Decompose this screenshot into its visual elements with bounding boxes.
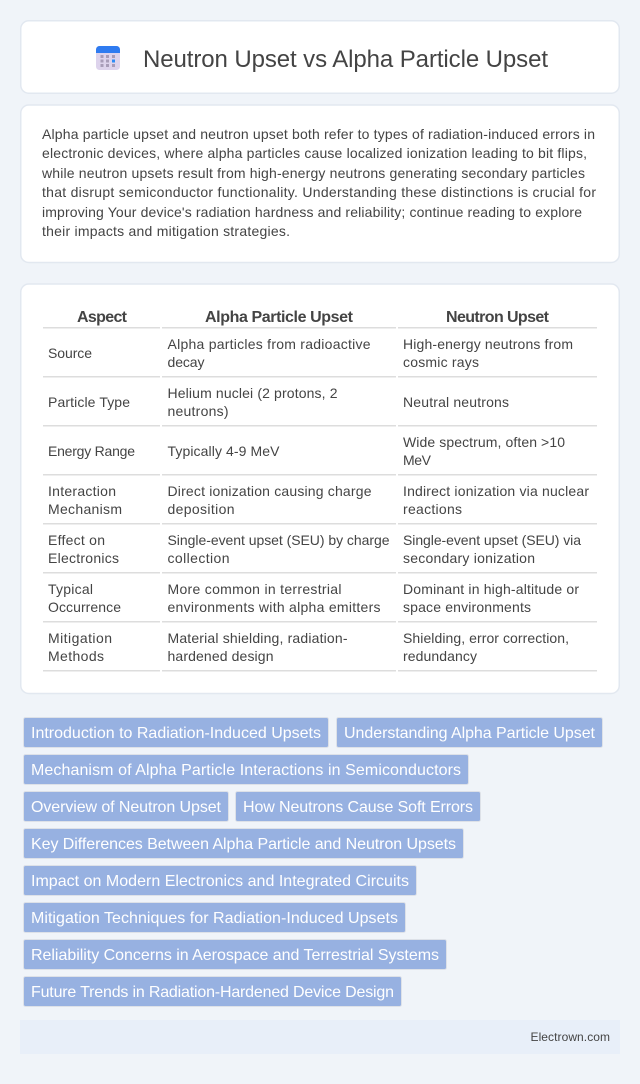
row: effect on electronics: Single-event upset (SEU) by charge <box>168 532 390 548</box>
intro paragraph: their impacts and mitigation strategies. <box>42 223 290 239</box>
tag: mitigation: Mitigation Techniques for Radiation-Induced Upsets <box>31 910 398 927</box>
row: typical occurrence: More common in terrestrial <box>168 581 342 597</box>
tag: reliability: Reliability Concerns in Aerospace and Terrestrial Systems <box>31 947 439 964</box>
row: energy range: MeV <box>403 452 432 468</box>
intro paragraph <box>41 126 596 239</box>
row: energy range: Wide spectrum, often >10 <box>403 434 565 450</box>
icon: calendar grid <box>96 46 120 70</box>
row: mitigation methods: Mitigation <box>48 630 112 646</box>
tag: how neutrons cause soft errors <box>236 792 480 822</box>
tag: introduction: Introduction to Radiation-Induced Upsets <box>31 725 321 742</box>
title: Neutron Upset vs Alpha Particle Upset <box>143 46 548 73</box>
row: typical occurrence: Occurrence <box>48 599 121 615</box>
row: typical occurrence: environments with alpha emitters <box>168 599 380 615</box>
intro paragraph: that disrupt semiconductor functionality. Understanding these distinctions is crucial for <box>42 184 596 200</box>
row: effect on electronics: Effect on <box>48 532 105 548</box>
row: energy range: Typically 4-9 MeV <box>168 443 280 459</box>
row: effect on electronics: Single-event upset (SEU) via <box>403 532 581 548</box>
row: energy range: Energy Range <box>48 443 135 459</box>
tag: impact: Impact on Modern Electronics and Integrated Circuits <box>31 873 409 890</box>
row: interaction mechanism: Interaction <box>48 483 116 499</box>
row: typical occurrence: space environments <box>403 599 531 615</box>
row: typical occurrence <box>43 581 597 622</box>
row: mitigation methods <box>43 630 597 672</box>
row: effect on electronics: collection <box>168 550 230 566</box>
row: interaction mechanism: reactions <box>403 501 462 517</box>
row: source: cosmic rays <box>403 354 479 370</box>
row: particle type: Particle Type <box>48 394 130 410</box>
panel: comparison table <box>21 284 619 694</box>
intro paragraph: while neutron upsets result from high-energy neutrons generating secondary particles <box>41 165 585 181</box>
tag: understanding alpha: Understanding Alpha Particle Upset <box>344 725 596 742</box>
row: typical occurrence: Typical <box>48 581 93 597</box>
tag: reliability <box>24 940 446 970</box>
row: source: Source <box>48 345 92 361</box>
tag: mechanism <box>24 754 468 784</box>
tag: mechanism: Mechanism of Alpha Particle Interactions in Semiconductors <box>31 762 461 779</box>
row: mitigation methods: hardened design <box>168 648 274 664</box>
panel: introduction <box>21 105 619 262</box>
row: interaction mechanism: deposition <box>168 501 234 517</box>
panel: topic tags <box>24 718 602 1006</box>
tag: future trends: Future Trends in Radiation-Hardened Device Design <box>31 984 394 1001</box>
tag: understanding alpha <box>336 718 602 748</box>
row: source: High-energy neutrons from <box>403 336 573 352</box>
table header row: Alpha Particle Upset <box>205 309 354 326</box>
row: typical occurrence: Dominant in high-altitude or <box>403 581 579 597</box>
tag: impact <box>24 866 416 896</box>
tag: mitigation <box>24 902 406 932</box>
footer: Electrown.com <box>530 1030 610 1044</box>
row: effect on electronics: secondary ionization <box>403 550 535 566</box>
row: mitigation methods: redundancy <box>403 648 477 664</box>
tag: key differences: Key Differences Between Alpha Particle and Neutron Upsets <box>31 836 456 853</box>
row: mitigation methods: Material shielding, radiation- <box>168 630 348 646</box>
intro paragraph: Alpha particle upset and neutron upset both refer to types of radiation-induced errors in <box>42 126 595 142</box>
row: particle type: Helium nuclei (2 protons, 2 <box>168 385 338 401</box>
row: interaction mechanism: Indirect ionization via nuclear <box>403 483 589 499</box>
panel: header <box>21 21 619 93</box>
row: particle type: Neutral neutrons <box>403 394 509 410</box>
footer <box>20 1020 620 1054</box>
tag: key differences <box>24 828 464 858</box>
row: interaction mechanism: Mechanism <box>48 501 122 517</box>
row: interaction mechanism <box>43 483 597 524</box>
row: particle type <box>43 385 597 426</box>
row: source <box>43 336 597 378</box>
row: effect on electronics: Electronics <box>48 550 119 566</box>
intro paragraph: electronic devices, where alpha particles cause localized ionization leading to bit flips, <box>42 145 587 161</box>
table header row: Neutron Upset <box>446 309 550 326</box>
intro paragraph: improving Your device's radiation hardness and reliability; continue reading to explore <box>42 204 582 220</box>
row: source: decay <box>168 354 204 370</box>
tag: overview of neutron upset <box>24 792 228 822</box>
tag: overview of neutron upset: Overview of Neutron Upset <box>31 799 222 816</box>
row: particle type: neutrons) <box>168 403 228 419</box>
tag: how neutrons cause soft errors: How Neutrons Cause Soft Errors <box>243 799 473 816</box>
tag: introduction <box>24 718 328 748</box>
row: source: Alpha particles from radioactive <box>168 336 371 352</box>
row: mitigation methods: Methods <box>48 648 104 664</box>
row: effect on electronics <box>43 532 597 574</box>
row: mitigation methods: Shielding, error correction, <box>403 630 569 646</box>
row: energy range <box>43 434 597 476</box>
row: interaction mechanism: Direct ionization causing charge <box>168 483 372 499</box>
tag: future trends <box>24 976 402 1006</box>
table header row <box>43 309 597 328</box>
table header row: Aspect <box>77 309 128 326</box>
